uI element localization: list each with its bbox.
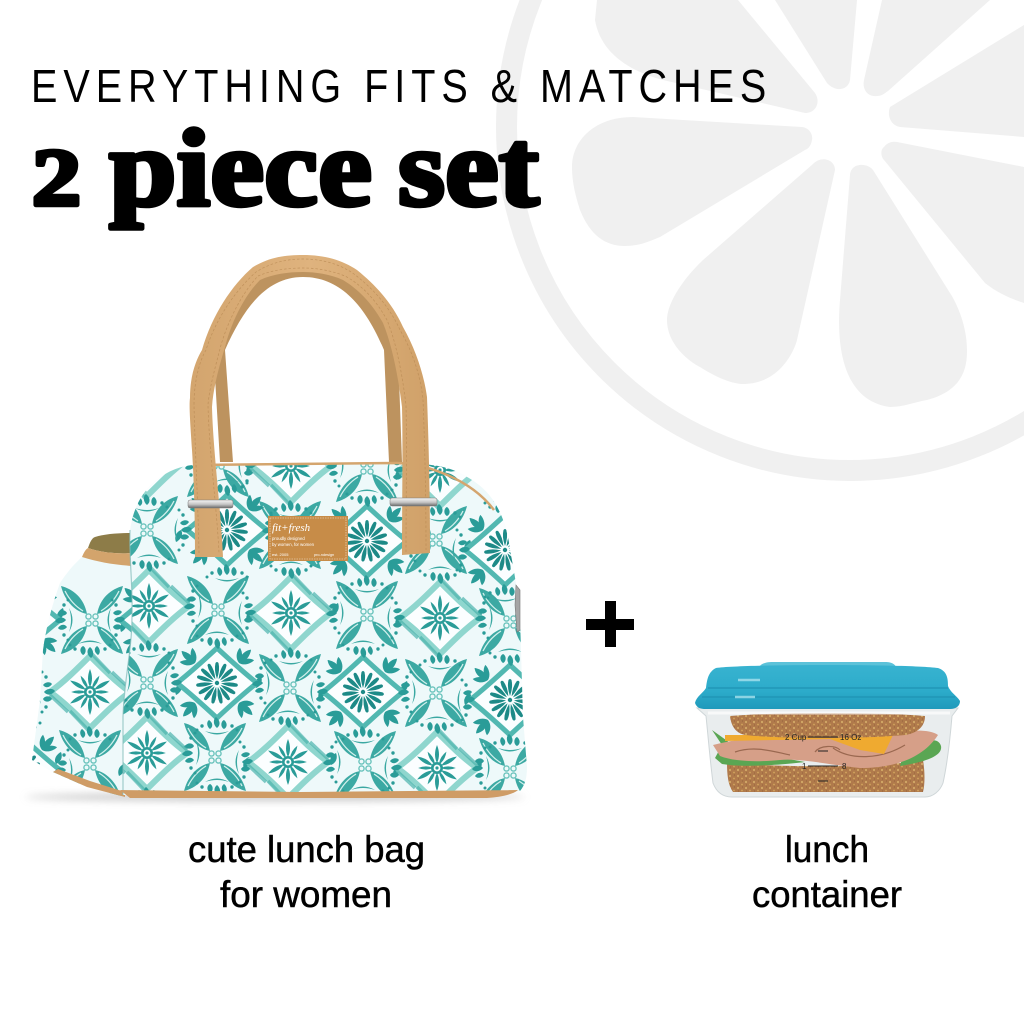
left handle buckle xyxy=(188,500,233,508)
lunch bag illustration xyxy=(30,255,527,805)
heading: 2 piece set: 2 xyxy=(32,132,81,223)
bag ground shadow xyxy=(25,793,525,801)
plus sign xyxy=(586,601,634,647)
body front edge shading xyxy=(123,530,132,795)
caption: cute lunch bag for women xyxy=(188,829,425,915)
slice segment: left xyxy=(572,117,812,246)
top bread xyxy=(730,713,925,738)
pocket fabric with tile print xyxy=(32,557,132,796)
heading: 2 piece set xyxy=(32,107,539,229)
title: everything fits and matches: EVERYTHING FITS & MATCHES xyxy=(31,61,766,113)
ham slices xyxy=(713,731,938,768)
bag base trim xyxy=(120,790,518,798)
background citrus slice xyxy=(506,0,1024,470)
pocket base trim xyxy=(53,769,125,797)
slice segment: top xyxy=(775,0,857,89)
blue lid xyxy=(695,662,960,709)
brand patch: fit+fresh xyxy=(272,522,311,534)
side water bottle pocket xyxy=(32,533,132,797)
slice segment: upper right xyxy=(864,0,990,96)
caption: lunch container xyxy=(752,829,902,915)
glass overlay and measurement marks: 2 Cup xyxy=(785,733,807,742)
slice segment: upper left xyxy=(595,0,818,113)
heading: 2 piece set: set xyxy=(398,107,539,229)
left lettuce xyxy=(712,730,805,766)
main bag body with tile print xyxy=(123,464,527,795)
glass overlay and measurement marks xyxy=(708,713,950,781)
sandwich xyxy=(712,713,941,792)
brand patch xyxy=(268,516,348,561)
cheese xyxy=(725,735,893,754)
pocket trim xyxy=(82,533,133,566)
heading: 2 piece set: piece xyxy=(109,107,372,229)
slice rind ring xyxy=(506,0,1024,470)
bottom bread xyxy=(727,760,924,792)
back handle xyxy=(214,262,402,462)
glass overlay and measurement marks: 16 Oz xyxy=(840,733,861,742)
caption: cute lunch bag for women: cute lunch bag xyxy=(188,829,425,870)
right handle buckle xyxy=(390,498,437,506)
caption: cute lunch bag for women: for women xyxy=(220,874,392,915)
handle stitching xyxy=(194,259,426,553)
brand patch: proudly designed xyxy=(272,536,305,541)
slice segment: lower right xyxy=(881,142,1024,303)
caption: lunch container: container xyxy=(752,874,902,915)
glass overlay and measurement marks: 8 xyxy=(842,762,847,771)
brand patch: pro-ndesign xyxy=(314,553,334,557)
front handle xyxy=(190,255,430,557)
caption: lunch container: lunch xyxy=(785,829,869,870)
brand patch: est. 2005 xyxy=(272,552,289,557)
zipper pull xyxy=(515,585,520,632)
brand patch: by women, for women xyxy=(272,542,315,547)
slice segment: right xyxy=(889,25,1024,137)
glass overlay and measurement marks: 1 xyxy=(802,762,807,771)
slice segment: lower left xyxy=(667,159,835,384)
zipper trim xyxy=(193,463,494,510)
right lettuce xyxy=(900,740,941,766)
slice segment: bottom xyxy=(839,165,967,407)
glass base xyxy=(697,708,958,797)
lunch container illustration xyxy=(695,662,960,797)
